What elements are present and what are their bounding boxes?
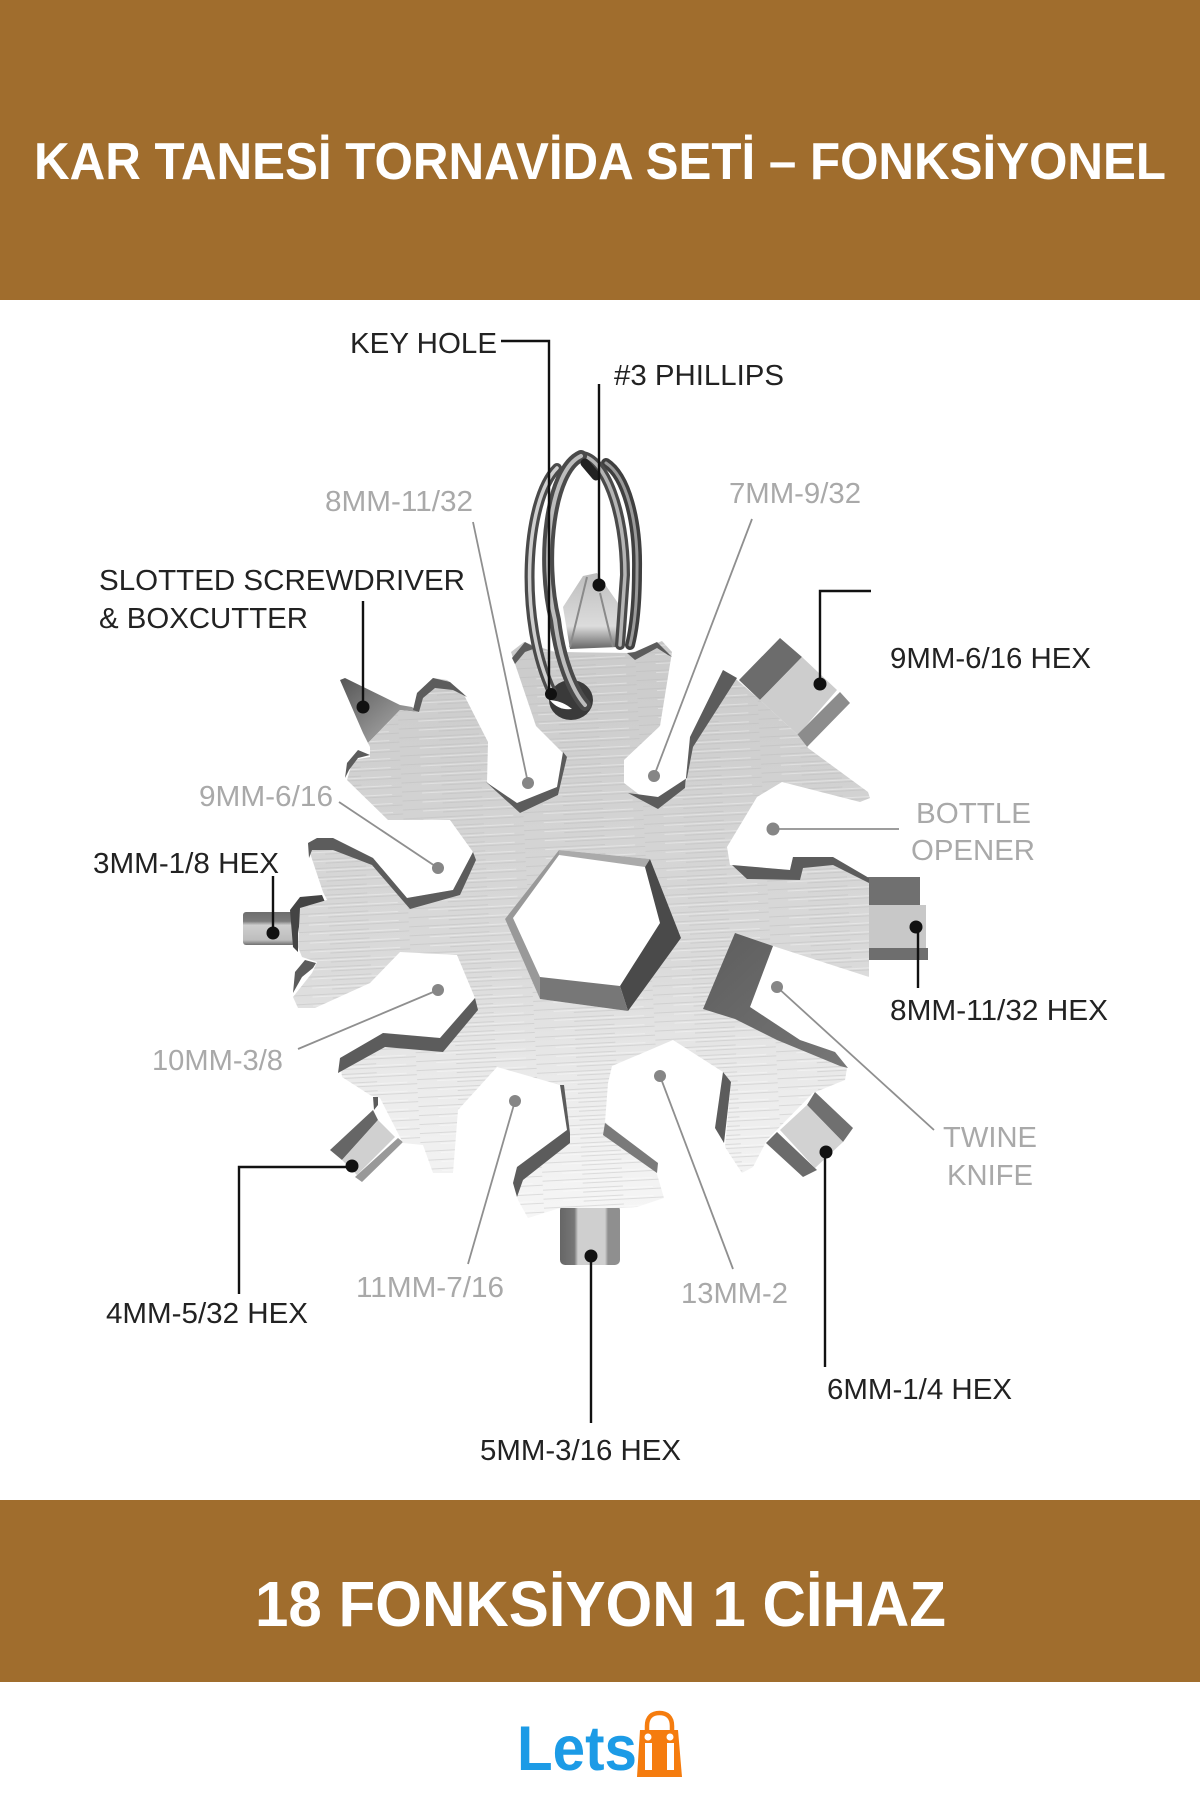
callout: 9mm hex — [814, 591, 1091, 690]
grey callouts — [152, 478, 1037, 1310]
dark bevel edges of the snowflake notches — [293, 642, 869, 1197]
callout: twine knife: KNIFE — [947, 1160, 1033, 1192]
callout: slotted screwdriver — [99, 565, 465, 714]
callout: 7mm wrench — [648, 478, 861, 782]
bit: 5mm hex — [560, 1205, 620, 1265]
callout: #3 phillips: #3 PHILLIPS — [614, 360, 784, 392]
centre hexagon opening — [505, 850, 681, 1011]
bit: 4mm hex — [330, 1110, 403, 1182]
key rings and loop — [530, 456, 637, 720]
panel: bottom slogan band — [0, 1500, 1200, 1682]
callout: 5mm hex — [480, 1250, 681, 1467]
callout: 9mm hex: 9MM-6/16 HEX — [890, 643, 1091, 675]
callout: twine knife: TWINE — [943, 1122, 1037, 1154]
key hole — [549, 680, 593, 720]
bit: 9mm hex — [739, 638, 850, 747]
bit: 3mm hex — [243, 895, 325, 952]
callout: 10mm wrench: 10MM-3/8 — [152, 1045, 283, 1077]
callout: 8mm wrench — [325, 486, 534, 789]
icon: phillips loop — [563, 573, 618, 649]
callout: 7mm wrench: 7MM-9/32 — [729, 478, 861, 510]
callout: 8mm hex: 8MM-11/32 HEX — [890, 995, 1108, 1027]
callout: slotted screwdriver: & BOXCUTTER — [99, 603, 308, 635]
callout: 13mm wrench: 13MM-2 — [681, 1278, 788, 1310]
callout: 3mm hex: 3MM-1/8 HEX — [93, 848, 279, 880]
twine knife blade — [703, 933, 848, 1068]
callout: 11mm wrench — [356, 1095, 521, 1304]
callout: #3 phillips — [592, 360, 784, 592]
diagram: snowflake multi-tool — [243, 456, 928, 1265]
snowflake body — [293, 641, 870, 1218]
slogan: 18 FONKSİYON 1 CİHAZ — [255, 1568, 946, 1640]
callout: bottle opener: BOTTLE — [916, 798, 1031, 830]
panel: top title band — [0, 0, 1200, 300]
wordmark: Lets — [517, 1714, 637, 1784]
dark callouts — [93, 328, 1108, 1467]
callout: 13mm wrench — [654, 1070, 788, 1310]
callout: 5mm hex: 5MM-3/16 HEX — [480, 1435, 681, 1467]
hex bits on the arm tips — [243, 638, 928, 1265]
callout: 10mm wrench — [152, 984, 444, 1077]
callout: 6mm hex — [820, 1146, 1012, 1406]
icon: shopping bag — [637, 1713, 682, 1777]
callout: 3mm hex — [93, 848, 280, 940]
callout: 9mm wrench: 9MM-6/16 — [199, 781, 333, 813]
callout: 4mm hex: 4MM-5/32 HEX — [106, 1298, 308, 1330]
callout: key hole: KEY HOLE — [350, 328, 497, 360]
callout: 8mm hex — [890, 920, 1108, 1027]
callout: 6mm hex: 6MM-1/4 HEX — [827, 1374, 1012, 1406]
callout: twine knife — [771, 981, 1037, 1192]
icon: slotted screwdriver blade — [340, 678, 418, 743]
callout: 11mm wrench: 11MM-7/16 — [356, 1272, 504, 1304]
callout: slotted screwdriver: SLOTTED SCREWDRIVER — [99, 565, 465, 597]
callout: 9mm wrench — [199, 781, 444, 874]
split rings — [530, 456, 637, 705]
bit: 6mm hex — [766, 1092, 853, 1177]
title: KAR TANESİ TORNAVİDA SETİ – FONKSİYONEL — [34, 133, 1166, 191]
callout: bottle opener — [766, 798, 1035, 867]
callout: key hole — [350, 328, 557, 700]
bit: 8mm hex — [865, 877, 928, 960]
callout: bottle opener: OPENER — [911, 835, 1035, 867]
callout: 8mm wrench: 8MM-11/32 — [325, 486, 473, 518]
callout: 4mm hex — [106, 1160, 358, 1330]
logo: Letsii — [517, 1713, 682, 1784]
